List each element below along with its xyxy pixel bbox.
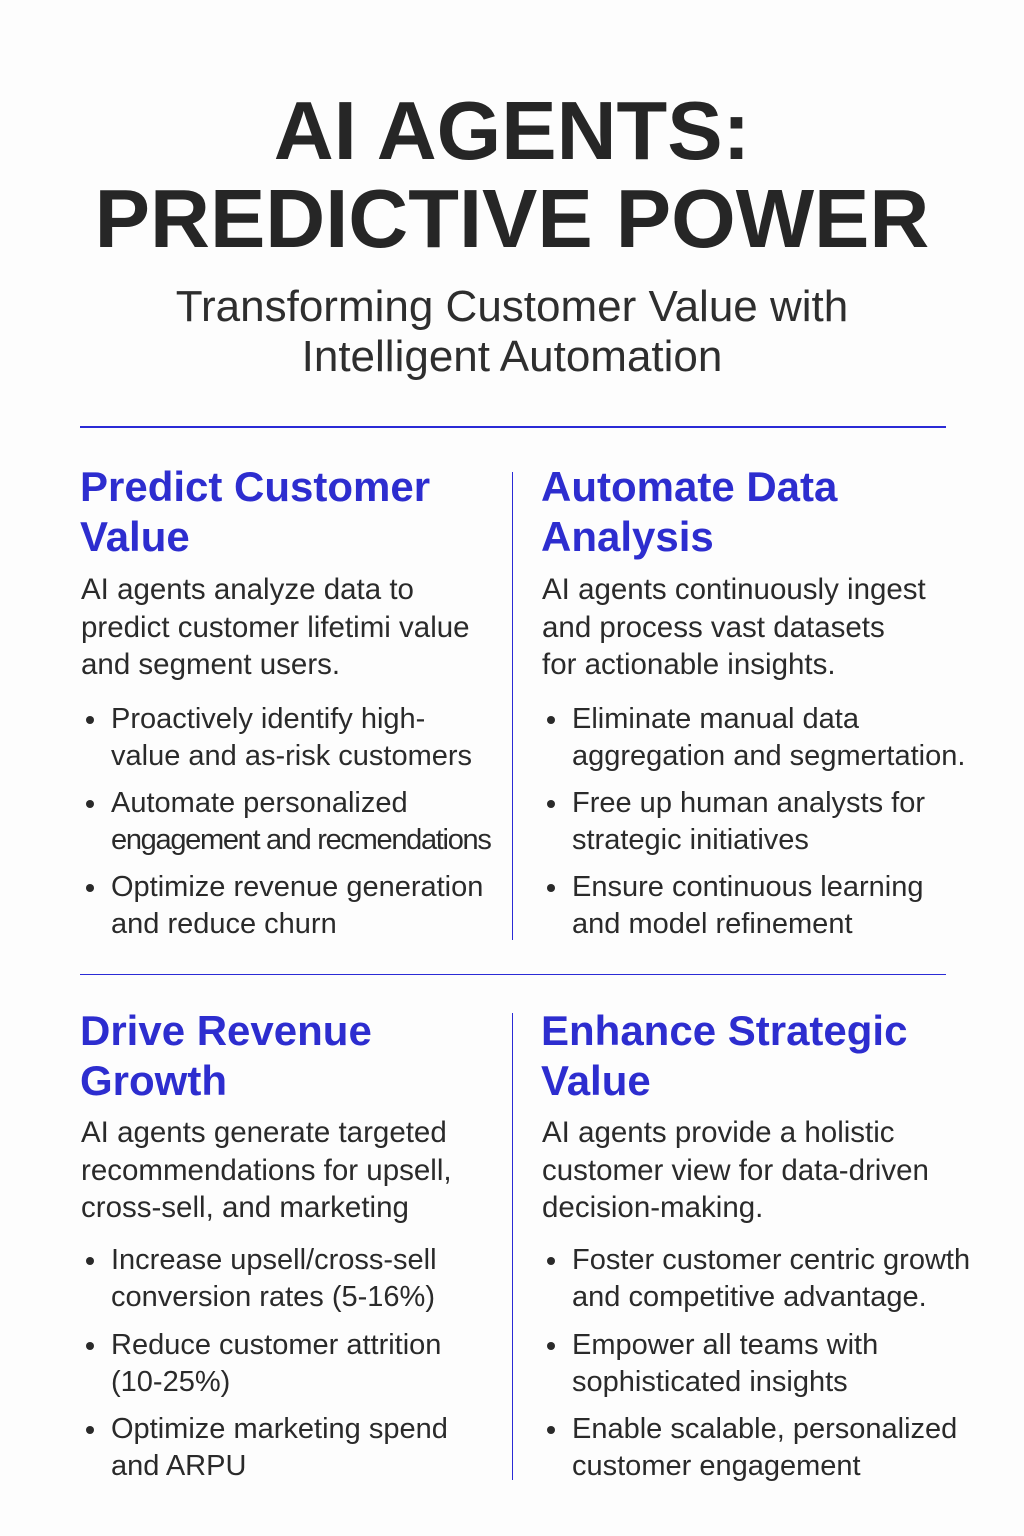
bullet: Foster customer centric growth: [572, 1244, 970, 1276]
bullet: and competitive advantage.: [572, 1281, 927, 1313]
bullet: [80, 869, 483, 943]
heading: Value: [80, 513, 190, 560]
heading: [80, 463, 430, 560]
body text: for actionable insights.: [542, 648, 836, 681]
body text: [81, 1116, 452, 1224]
body text: and process vast datasets: [542, 610, 885, 644]
bullet: Enable scalable, personalized: [572, 1413, 957, 1445]
bullet: [80, 785, 491, 859]
bullet: (10-25%): [111, 1366, 230, 1398]
bullet: [80, 1411, 448, 1485]
bullet: Increase upsell/cross-sell: [111, 1244, 437, 1276]
bullet: Automate personalized: [111, 787, 408, 819]
bullet: conversion rates (5-16%): [111, 1281, 435, 1313]
bullet: and model refinement: [572, 908, 852, 940]
title: PREDICTIVE POWER: [95, 172, 929, 265]
bullet: sophisticated insights: [572, 1366, 848, 1398]
heading: Automate Data: [541, 463, 837, 510]
bullet: [541, 1327, 878, 1401]
panel: drive revenue growth: [80, 1007, 452, 1482]
bullet: Eliminate manual data: [572, 703, 859, 735]
heading: Enhance Strategic: [541, 1007, 907, 1054]
body text: [542, 1116, 929, 1224]
subtitle: Transforming Customer Value with: [176, 282, 848, 331]
body text: decision-making.: [542, 1191, 763, 1224]
bullet: Ensure continuous learning: [572, 871, 923, 903]
bullet: engagement and recmendations: [111, 824, 491, 856]
bullet: customer engagement: [572, 1450, 861, 1482]
body text: recommendations for upsell,: [81, 1154, 452, 1186]
body text: customer view for data-driven: [542, 1154, 929, 1186]
body text: predict customer lifetimi value: [81, 610, 470, 644]
bullet: strategic initiatives: [572, 824, 809, 856]
bullet: [541, 701, 965, 775]
bullet: [80, 1327, 441, 1401]
bullet: aggregation and segmertation.: [572, 740, 965, 772]
bullet: Reduce customer attrition: [111, 1329, 441, 1361]
heading: Analysis: [541, 513, 714, 560]
heading: Predict Customer: [80, 463, 430, 510]
body text: AI agents provide a holistic: [542, 1116, 895, 1149]
body text: AI agents continuously ingest: [542, 573, 926, 606]
heading: [541, 463, 838, 560]
bullet: [541, 1411, 957, 1485]
bullet: and ARPU: [111, 1450, 246, 1482]
body text: AI agents analyze data to: [81, 573, 414, 606]
heading: Value: [541, 1057, 651, 1104]
heading: Growth: [80, 1057, 227, 1104]
bullet: Proactively identify high-: [111, 703, 425, 735]
heading: Drive Revenue: [80, 1007, 372, 1054]
body text: and segment users.: [81, 648, 340, 681]
body text: AI agents generate targeted: [81, 1116, 447, 1149]
heading: [541, 1007, 907, 1104]
bullet: [541, 1242, 970, 1316]
bullet: Optimize marketing spend: [111, 1413, 448, 1445]
bullet: and reduce churn: [111, 908, 337, 940]
bullet: Empower all teams with: [572, 1329, 878, 1361]
bullet: Optimize revenue generation: [111, 871, 483, 903]
panel: enhance strategic value: [541, 1007, 970, 1482]
title: [95, 84, 929, 265]
heading: [80, 1007, 372, 1104]
panel: automate data analysis: [541, 463, 965, 940]
panel: predict customer value: [80, 463, 491, 940]
body text: [81, 573, 470, 681]
body text: [542, 573, 926, 681]
body text: cross-sell, and marketing: [81, 1191, 409, 1224]
subtitle: [176, 282, 848, 381]
bullet: Free up human analysts for: [572, 787, 925, 819]
bullet: [541, 785, 925, 859]
title: AI AGENTS:: [274, 84, 750, 177]
bullet: [80, 1242, 437, 1316]
bullet: [541, 869, 923, 943]
bullet: [80, 701, 472, 775]
subtitle: Intelligent Automation: [302, 332, 722, 381]
bullet: value and as-risk customers: [111, 740, 472, 772]
